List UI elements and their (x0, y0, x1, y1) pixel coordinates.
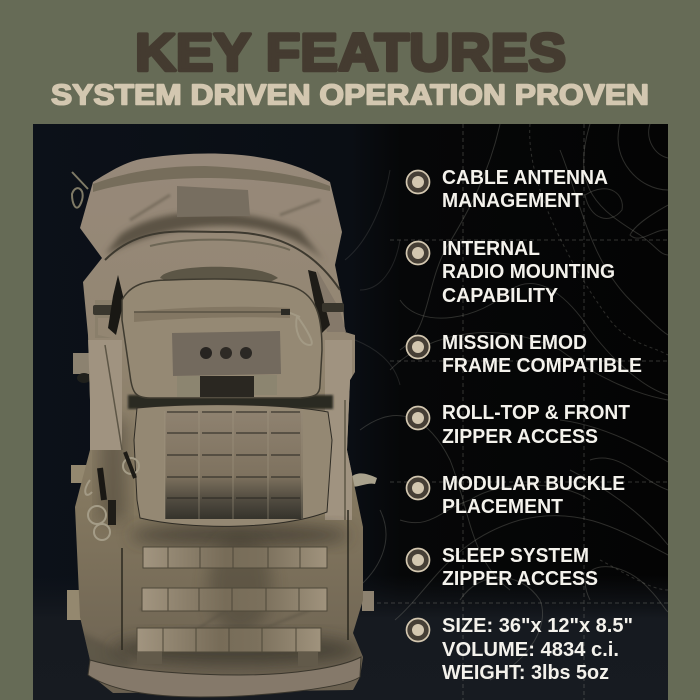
top velcro patch (177, 186, 250, 217)
icon: bullet (406, 170, 430, 194)
gap shadow between pouches (128, 395, 333, 409)
feature: roll-top and front zipper: ZIPPER ACCESS (442, 426, 598, 448)
icon: bullet (406, 336, 430, 358)
feature: mission emod frame: MISSION EMOD (442, 332, 587, 354)
photo panel (33, 124, 668, 700)
feature: modular buckle placement: MODULAR BUCKLE (442, 473, 625, 495)
feature: internal radio mounting (406, 240, 614, 302)
strap and lower zipper arc (105, 231, 340, 290)
pouch tabs (200, 376, 254, 397)
feature: modular buckle placement (406, 476, 624, 513)
roll-top zipper (93, 166, 330, 192)
feature: roll-top and front zipper (406, 405, 630, 443)
feature: cable antenna management (406, 170, 608, 207)
icon: bullet (406, 548, 430, 572)
feature: cable antenna management: MANAGEMENT (442, 190, 583, 212)
icon: bullet (406, 242, 430, 264)
feature: sleep system zipper (406, 548, 598, 585)
front pouch (122, 279, 322, 398)
bottom bumper band (88, 657, 361, 697)
side hardware rings (85, 452, 139, 540)
right buckle (308, 270, 346, 333)
map grid dashes (370, 124, 668, 700)
velcro patch with three holes (172, 331, 281, 376)
molle webbing rows (137, 547, 327, 666)
topographic contour lines (345, 124, 668, 680)
feature list (406, 167, 642, 684)
fabric shading (75, 195, 360, 675)
feature: mission emod frame: FRAME COMPATIBLE (442, 355, 642, 377)
title: KEY FEATURES (135, 24, 566, 82)
feature: size, volume, weight specs: VOLUME: 4834 c.i. (442, 639, 619, 661)
bag body (75, 154, 363, 693)
feature: sleep system zipper: SLEEP SYSTEM (442, 545, 589, 567)
feature: internal radio mounting: INTERNAL (442, 238, 540, 260)
feature: mission emod frame (406, 334, 642, 372)
feature: size, volume, weight specs: SIZE: 36"x 12"x 8.5" (442, 615, 633, 637)
icon: bullet (406, 406, 430, 430)
feature: size, volume, weight specs: WEIGHT: 3lbs 5oz (442, 662, 609, 684)
feature: size, volume, weight specs (406, 618, 632, 679)
icon: bullet (406, 618, 430, 642)
laser cut panel pouch (134, 405, 332, 526)
backpack photo (67, 154, 377, 697)
subtitle: SYSTEM DRIVEN OPERATION PROVEN (51, 80, 649, 112)
feature: internal radio mounting: RADIO MOUNTING (442, 261, 615, 283)
feature: sleep system zipper: ZIPPER ACCESS (442, 568, 598, 590)
feature: cable antenna management: CABLE ANTENNA (442, 167, 608, 189)
left buckle (93, 275, 125, 338)
feature: modular buckle placement: PLACEMENT (442, 496, 563, 518)
feature: roll-top and front zipper: ROLL-TOP & FRONT (442, 402, 630, 424)
icon: bullet (406, 476, 430, 500)
feature: internal radio mounting: CAPABILITY (442, 285, 559, 307)
side loops (67, 172, 377, 620)
